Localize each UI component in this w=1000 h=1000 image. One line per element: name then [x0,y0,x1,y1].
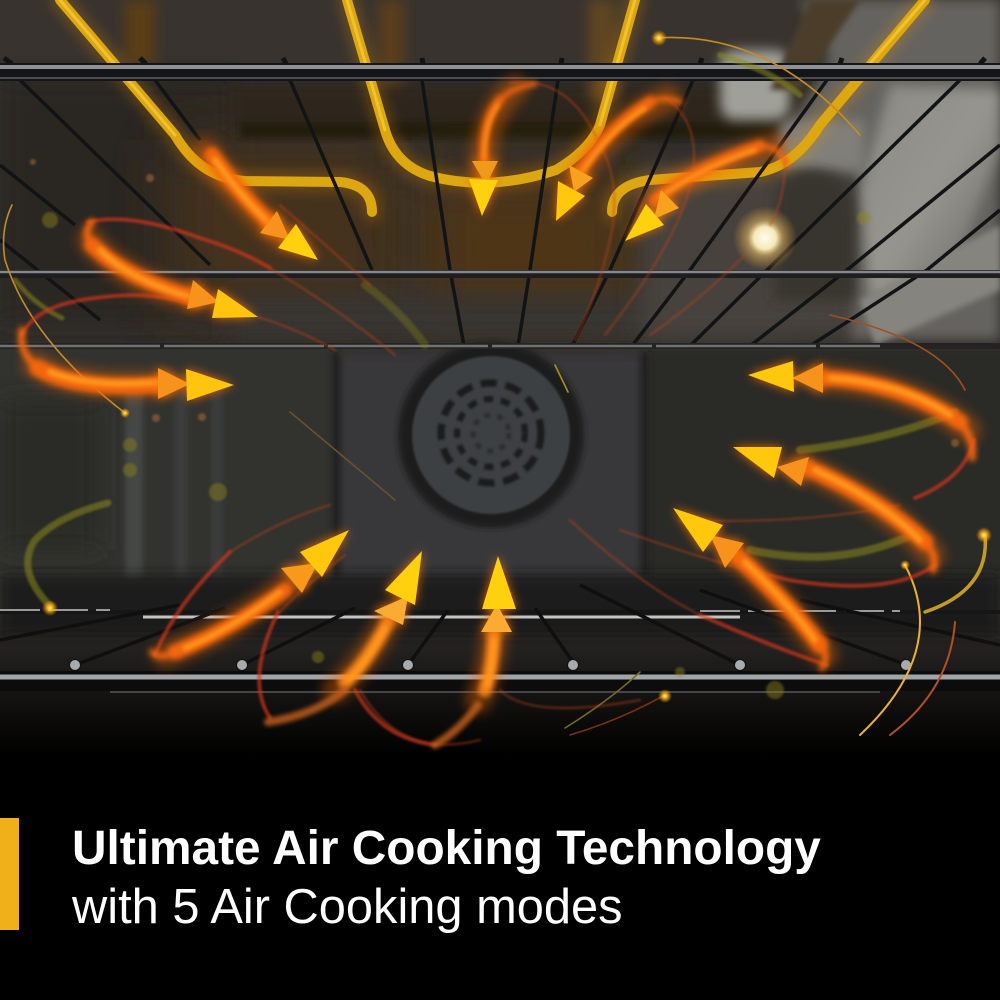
bottom arrows [281,563,318,593]
caption subheading: with 5 Air Cooking modes [72,880,623,934]
caption heading: Ultimate Air Cooking Technology [72,822,821,875]
black caption band [0,755,1000,1000]
airflow arrowheads [158,161,823,632]
lower oven rack [0,577,1000,692]
yellow accent bar [0,818,19,930]
airflow swirl trails [21,84,973,745]
heating element [60,0,925,212]
left arrows [158,368,190,399]
bottom fade to black [0,610,1000,755]
convection fan [398,342,584,528]
caption text [72,822,821,934]
lower walls [0,345,335,615]
right bright wall [640,165,860,340]
top oven rack [0,58,1000,346]
top arrows [472,161,498,185]
thin red return trails [22,82,974,745]
warm glow zones [170,140,400,310]
oven cavity background [0,0,1000,760]
olive and thin light streaks [4,37,985,735]
sparkles and orbs [30,30,992,703]
right arrows [792,363,823,393]
